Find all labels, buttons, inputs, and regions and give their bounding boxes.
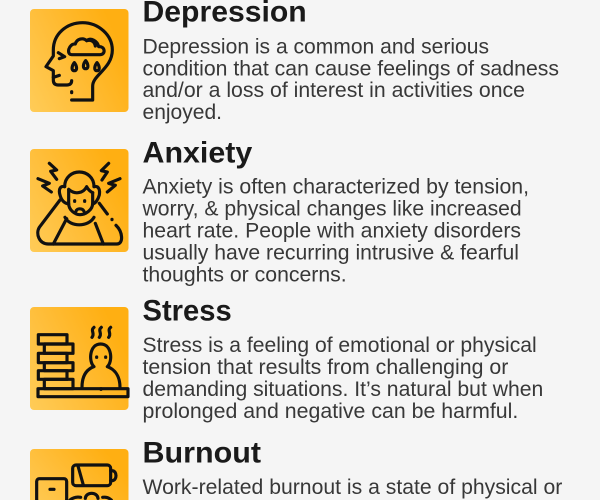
heading: Anxiety: Anxiety [142, 136, 253, 169]
text block: anxiety description: thoughts or concerns. [142, 263, 347, 286]
icon: person behind stack of paperwork [30, 307, 128, 410]
icon: person holding head with lightning bolts [30, 149, 128, 252]
text block: anxiety description: usually have recurring intrusive & fearful [142, 241, 519, 264]
text block: anxiety description: Anxiety is often characterized by tension, [142, 175, 529, 198]
heading: Burnout: Burnout [142, 437, 261, 470]
text block: stress description: demanding situations. It’s natural but when [142, 378, 543, 401]
text block: depression description: enjoyed. [142, 101, 222, 124]
text block: depression description [142, 35, 559, 124]
text block: anxiety description: heart rate. People with anxiety disorders [142, 219, 521, 242]
panel: depression [30, 0, 559, 124]
text block: depression description: Depression is a common and serious [142, 35, 489, 58]
panel: stress [30, 295, 543, 423]
panel: burnout [30, 437, 562, 500]
text block: burnout description: Work-related burnout is a state of physical or [142, 476, 562, 499]
text block: anxiety description: worry, & physical changes like increased [141, 197, 522, 220]
text block: stress description: Stress is a feeling of emotional or physical [142, 334, 537, 357]
icon: head with rain cloud [30, 9, 128, 112]
text block: stress description: tension that results from challenging or [142, 356, 508, 379]
heading: Stress: Stress [142, 295, 232, 328]
text block: stress description [142, 334, 543, 423]
text block: stress description: prolonged and negative can be harmful. [142, 400, 518, 423]
text block: depression description: and/or a loss of interest in activities once [142, 79, 525, 102]
text block: depression description: condition that can cause feelings of sadness [142, 57, 559, 80]
panel: anxiety [30, 136, 529, 286]
text block: anxiety description [141, 175, 529, 286]
icon: low battery, laptop and person [30, 449, 128, 500]
